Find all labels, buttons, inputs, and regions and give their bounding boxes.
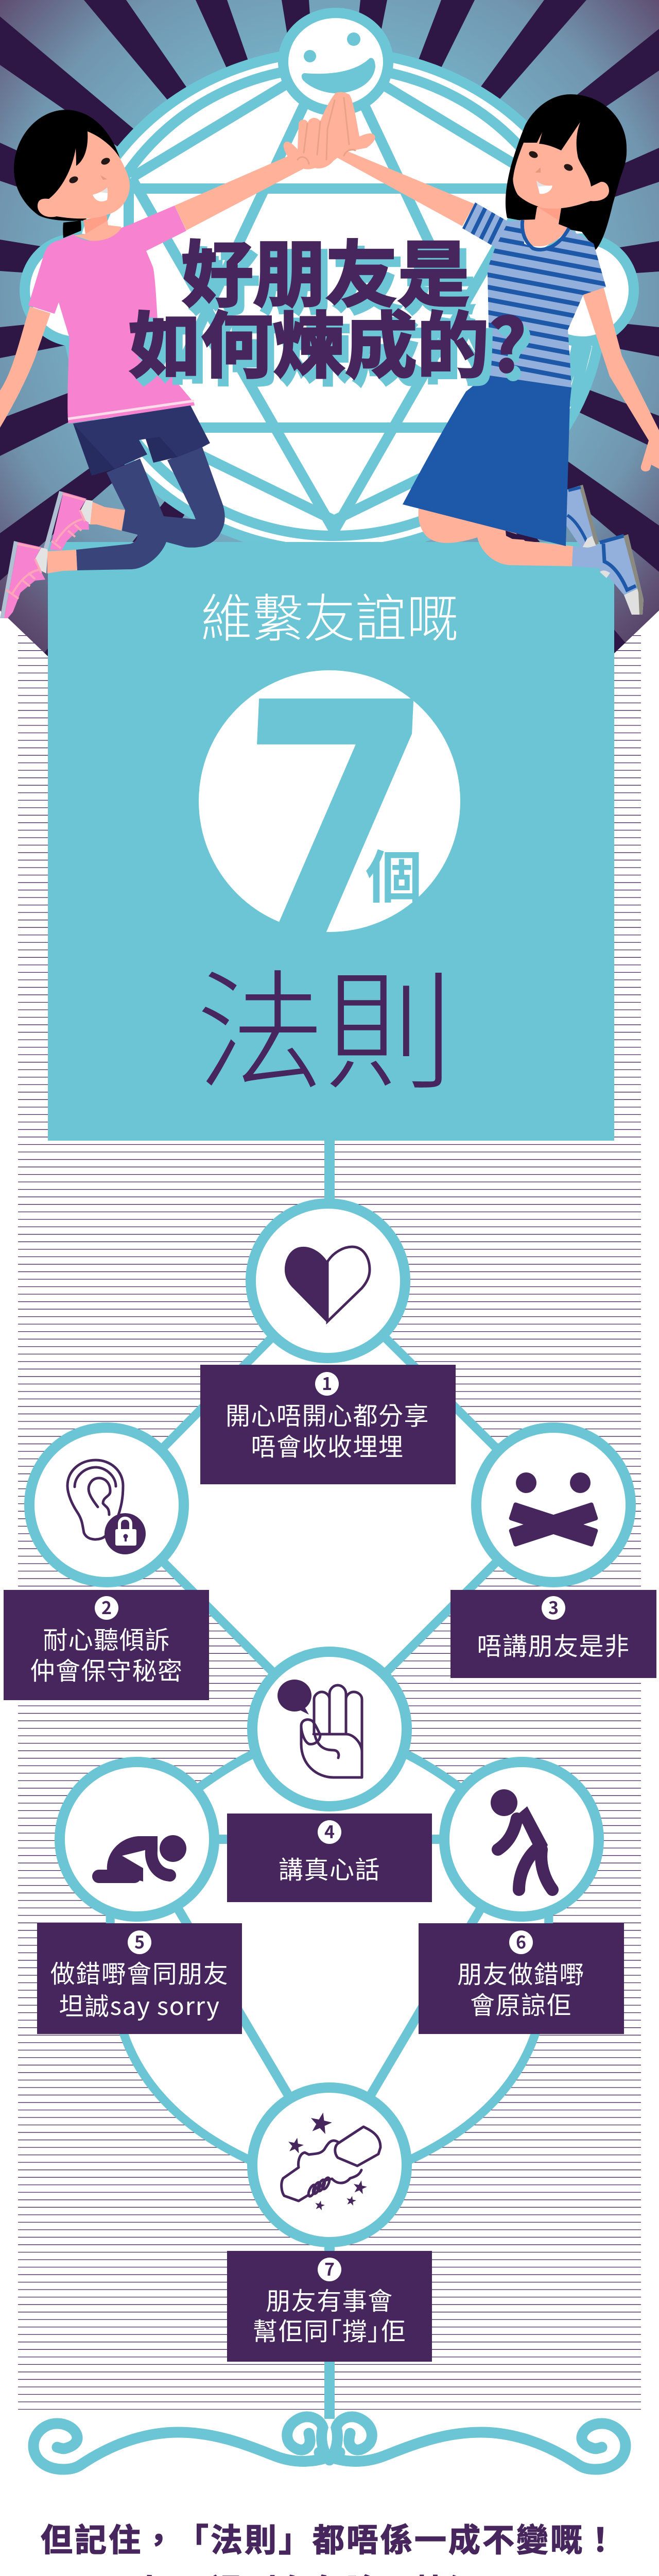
rule 6 box: 朋友做錯嘢 <box>457 1954 585 1990</box>
rule 5 box: 坦誠say sorry <box>59 1986 220 2022</box>
rule 2 box: 仲會保守秘密 <box>30 1651 183 1687</box>
pony tail <box>63 221 81 238</box>
skirt <box>403 375 571 546</box>
rule 6 box: 會原諒佢 <box>470 1985 572 2021</box>
face <box>513 122 609 209</box>
shirt <box>28 206 195 423</box>
legs <box>122 447 225 548</box>
rule 2 box <box>4 1590 209 1700</box>
title: 好朋友是如何煉成的?: 如何煉成的? <box>129 289 526 393</box>
rule 3 box: 唔講朋友是非 <box>477 1626 630 1662</box>
rule 7 box: 7 <box>324 2256 335 2281</box>
rule 2 box: 耐心聽傾訴 <box>43 1620 170 1656</box>
diamond connector <box>107 1281 553 1729</box>
rule 7 box: 朋友有事會 <box>266 2281 393 2317</box>
rule 4 box: 講真心話 <box>279 1850 380 1886</box>
rule 2 circle with ear and lock icon <box>29 1428 184 1582</box>
legs <box>419 509 505 543</box>
rule 5 circle with kneeling person icon <box>60 1762 214 1917</box>
raised arm <box>175 154 309 230</box>
shorts <box>73 405 210 476</box>
rule 7 box: 幫佢同「撐」佢 <box>253 2311 406 2347</box>
front shoe <box>600 534 644 615</box>
rule 4 box: 4 <box>324 1818 335 1843</box>
stem from panel <box>324 1141 335 1200</box>
title: 好朋友是如何煉成的? <box>129 217 526 393</box>
rule 7 circle with helping hands icon <box>252 2088 407 2242</box>
striped background lines <box>18 635 641 2410</box>
rule 6 box: 6 <box>516 1928 526 1954</box>
girl left in pink t-shirt <box>0 110 309 618</box>
title: 好朋友是如何煉成的?: 好朋友是 <box>181 217 470 321</box>
arm down and hand <box>583 286 659 471</box>
rule 4 circle with raised hand icon <box>252 1652 407 1806</box>
neck <box>520 207 568 246</box>
feet and socks <box>90 501 125 531</box>
heading: 法則: 法則 <box>196 928 454 1115</box>
high-five hands <box>284 92 375 170</box>
rule 1 box <box>200 1365 456 1484</box>
rule 4 box <box>227 1814 432 1902</box>
white circle with big 7: 7 <box>226 633 439 1020</box>
heading: 維繫友誼嘅: 維繫友誼嘅 <box>201 577 458 652</box>
rule 6 box <box>419 1923 624 2034</box>
rule 1 box: 1 <box>322 1370 332 1395</box>
rule 1 box: 唔會收收埋埋 <box>251 1427 404 1463</box>
rule 5 box: 5 <box>134 1928 145 1954</box>
neck <box>74 215 122 243</box>
hair <box>506 94 627 250</box>
pink shoes <box>44 491 63 550</box>
hero background with rays <box>0 0 659 670</box>
rule 5 box <box>37 1923 242 2034</box>
rule 3 box <box>450 1590 656 1678</box>
white circle with big 7: 個 <box>366 832 422 914</box>
lower shield connector <box>110 1729 549 2165</box>
raised arm <box>336 150 475 226</box>
back shoe <box>566 485 599 549</box>
smiley face at top of emblem <box>283 13 388 111</box>
connector network between rule circles <box>107 1141 553 2419</box>
girl right in striped t-shirt <box>336 94 659 615</box>
rule 2 box: 2 <box>101 1594 112 1619</box>
sock <box>572 545 601 568</box>
lowered arm <box>0 307 50 428</box>
closing message: 但記住，「法則」都唔係一成不變嘅！ <box>41 2514 618 2561</box>
stem to swirl <box>324 2246 335 2419</box>
rule 7 box <box>227 2251 432 2362</box>
rule 3 box: 3 <box>548 1594 559 1619</box>
teal panel <box>48 542 614 1141</box>
rule 3 circle with covered mouth icon <box>476 1428 631 1582</box>
swirl divider top <box>33 2417 626 2469</box>
rule 5 box: 做錯嘢會同朋友 <box>50 1954 229 1990</box>
gem emblem behind the girls <box>25 52 634 551</box>
striped shirt body <box>488 220 606 387</box>
face <box>38 131 130 218</box>
rule 6 circle with bent person icon <box>444 1762 599 1917</box>
rule 1 circle with heart icon <box>251 1204 405 1358</box>
rule 1 box: 開心唔開心都分享 <box>226 1396 429 1432</box>
hair <box>14 110 120 221</box>
